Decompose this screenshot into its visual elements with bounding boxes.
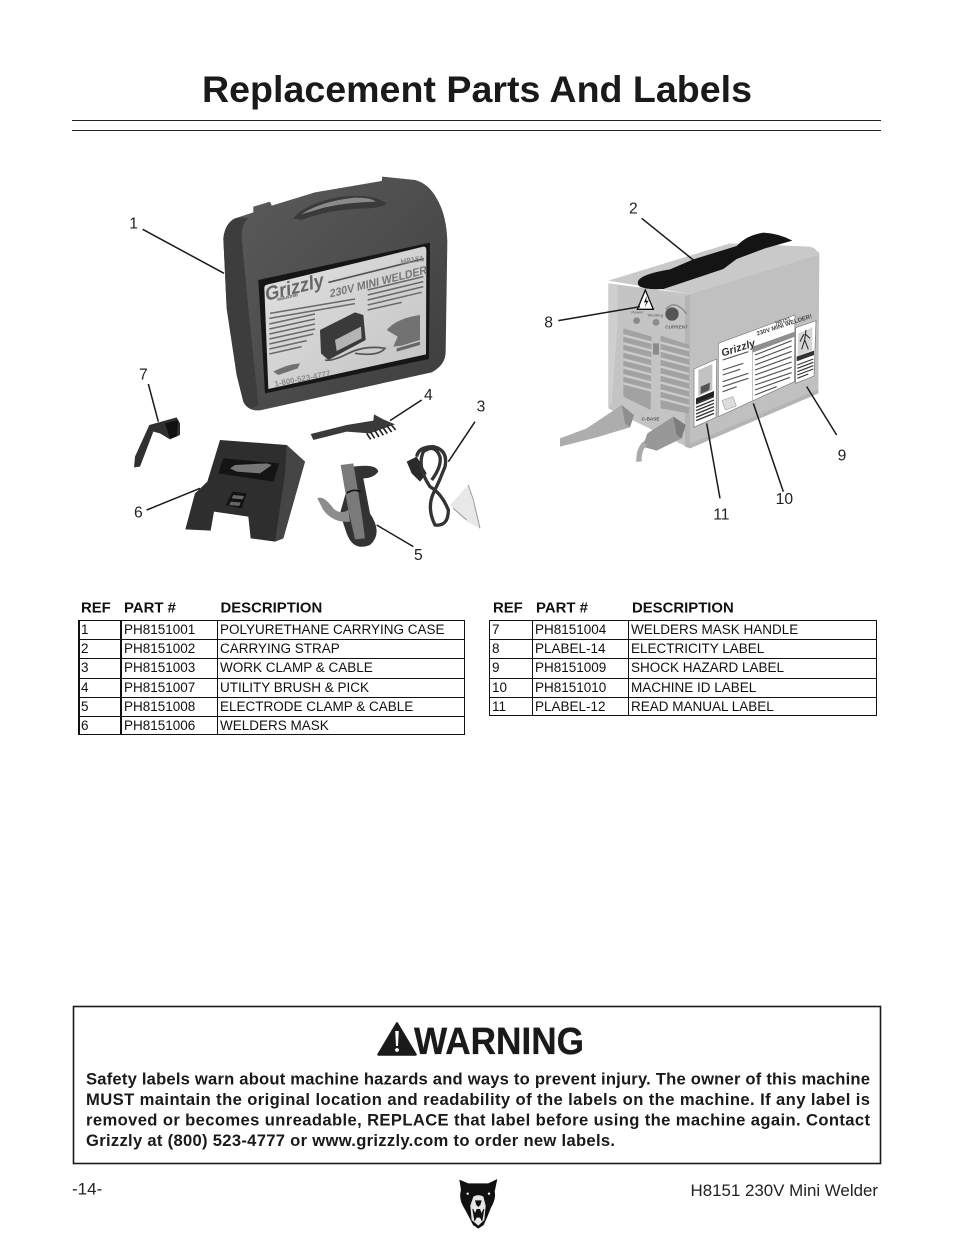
leader lines and callout numbers: 9 xyxy=(838,448,846,465)
machine id label: 230V MINI WELDER! xyxy=(756,314,813,338)
table rows: 8 xyxy=(492,641,500,656)
warning heading: WARNING xyxy=(414,1021,584,1063)
icon: grizzly bear logo xyxy=(459,1179,497,1229)
table header: DESCRIPTION xyxy=(632,600,734,616)
table rows: PH8151004 xyxy=(535,622,607,637)
leader lines and callout numbers: 7 xyxy=(139,366,148,383)
read manual label xyxy=(694,359,717,427)
table rows: ELECTRICITY LABEL xyxy=(631,641,765,656)
table rows xyxy=(81,622,445,733)
welders mask handle xyxy=(134,417,180,467)
warning text: MUST maintain the original location and readability of the labels on the machine. If any label is xyxy=(86,1090,870,1109)
table rows: UTILITY BRUSH & PICK xyxy=(220,680,369,695)
warning box xyxy=(74,1006,880,1164)
knob and indicators: Welding xyxy=(648,313,664,318)
leader lines and callout numbers: 8 xyxy=(544,314,553,331)
machine id label xyxy=(718,314,813,417)
table rows: 10 xyxy=(492,680,507,695)
carrying case xyxy=(223,177,447,410)
knob and indicators: CURRENT xyxy=(665,324,688,329)
warning text: removed or becomes unreadable, REPLACE that label before using the machine again. Contact xyxy=(86,1110,870,1130)
table header: REF xyxy=(81,600,111,616)
cables and connectors xyxy=(560,405,686,462)
machine id label: H8151 xyxy=(775,316,792,327)
table rows: PLABEL-12 xyxy=(535,699,606,714)
left parts table xyxy=(78,600,465,735)
right parts table xyxy=(489,600,877,716)
table rows: PH8151006 xyxy=(124,718,195,733)
table rows: PH8151002 xyxy=(124,641,195,656)
table header xyxy=(81,600,322,616)
warning text: Grizzly at (800) 523-4777 or www.grizzly.com to order new labels. xyxy=(86,1131,615,1150)
case label text: Grizzly xyxy=(265,269,324,306)
table header: PART # xyxy=(536,600,589,616)
table rows: 5 xyxy=(81,699,89,714)
table rows: 1 xyxy=(81,622,89,637)
leader lines and callout numbers xyxy=(544,200,846,523)
leader lines and callout numbers: 11 xyxy=(713,506,729,523)
table rows: 9 xyxy=(492,660,500,675)
page number: -14- xyxy=(72,1180,102,1198)
table header: DESCRIPTION xyxy=(220,600,322,616)
case label text: H8151 xyxy=(400,254,425,266)
table rows: WELDERS MASK xyxy=(220,718,329,733)
table rows: WORK CLAMP & CABLE xyxy=(220,660,373,675)
table header xyxy=(493,600,734,616)
table rows: MACHINE ID LABEL xyxy=(631,680,757,695)
work clamp and cable xyxy=(407,447,480,528)
table rows: PH8151008 xyxy=(124,699,195,714)
table rows: 4 xyxy=(81,680,89,695)
table rows: CARRYING STRAP xyxy=(220,641,340,656)
table rows: 11 xyxy=(492,699,506,714)
electrode clamp and cable xyxy=(317,463,378,547)
table header: PART # xyxy=(124,600,177,616)
cables and connectors: C-BASE xyxy=(642,417,660,422)
table rows: POLYURETHANE CARRYING CASE xyxy=(220,622,445,637)
warning text xyxy=(86,1070,870,1150)
table grid xyxy=(489,620,877,716)
table rows: PH8151010 xyxy=(535,680,606,695)
table rows: 2 xyxy=(81,641,89,656)
table rows: 7 xyxy=(492,622,500,637)
welders mask xyxy=(185,440,305,542)
table rows: PLABEL-14 xyxy=(535,641,606,656)
figure: accessories kit xyxy=(129,177,486,564)
case label text: 1-800-523-4777 xyxy=(274,369,332,389)
table header: REF xyxy=(493,600,523,616)
welder body xyxy=(608,243,819,448)
knob and indicators: Power xyxy=(631,310,644,315)
footer model name: H8151 230V Mini Welder xyxy=(691,1181,878,1200)
knob and indicators xyxy=(631,305,688,355)
title: Replacement Parts And Labels xyxy=(202,68,752,110)
case label text xyxy=(265,254,428,389)
table rows: READ MANUAL LABEL xyxy=(631,699,774,714)
table rows: ELECTRODE CLAMP & CABLE xyxy=(220,699,413,714)
leader lines and callout numbers xyxy=(129,215,486,564)
electricity label xyxy=(637,290,653,309)
leader lines and callout numbers: 10 xyxy=(776,491,793,508)
strap xyxy=(638,233,792,289)
icon: warning triangle xyxy=(378,1024,416,1054)
shock hazard label xyxy=(796,321,816,383)
utility brush and pick xyxy=(311,414,396,440)
leader lines and callout numbers: 6 xyxy=(134,504,143,521)
leader lines and callout numbers: 5 xyxy=(414,547,423,564)
table rows: PH8151007 xyxy=(124,680,195,695)
machine id label: Grizzly xyxy=(720,337,758,360)
leader lines and callout numbers: 4 xyxy=(424,387,433,404)
table rows: 3 xyxy=(81,660,89,675)
figure: welder xyxy=(544,200,846,523)
table rows xyxy=(492,622,798,714)
case label text: 230V MINI WELDER xyxy=(330,264,428,301)
leader lines and callout numbers: 2 xyxy=(629,200,638,217)
vents xyxy=(623,328,689,413)
table rows: PH8151009 xyxy=(535,660,606,675)
table rows: SHOCK HAZARD LABEL xyxy=(631,660,785,675)
warning text: Safety labels warn about machine hazards and ways to prevent injury. The owner of this machine xyxy=(86,1070,870,1088)
table grid xyxy=(78,620,465,735)
table rows: 6 xyxy=(81,718,89,733)
leader lines and callout numbers: 3 xyxy=(477,399,486,416)
leader lines and callout numbers: 1 xyxy=(129,215,138,232)
table rows: WELDERS MASK HANDLE xyxy=(631,622,798,637)
table rows: PH8151001 xyxy=(124,622,195,637)
case label text: Industrial xyxy=(277,292,299,302)
table rows: PH8151003 xyxy=(124,660,195,675)
